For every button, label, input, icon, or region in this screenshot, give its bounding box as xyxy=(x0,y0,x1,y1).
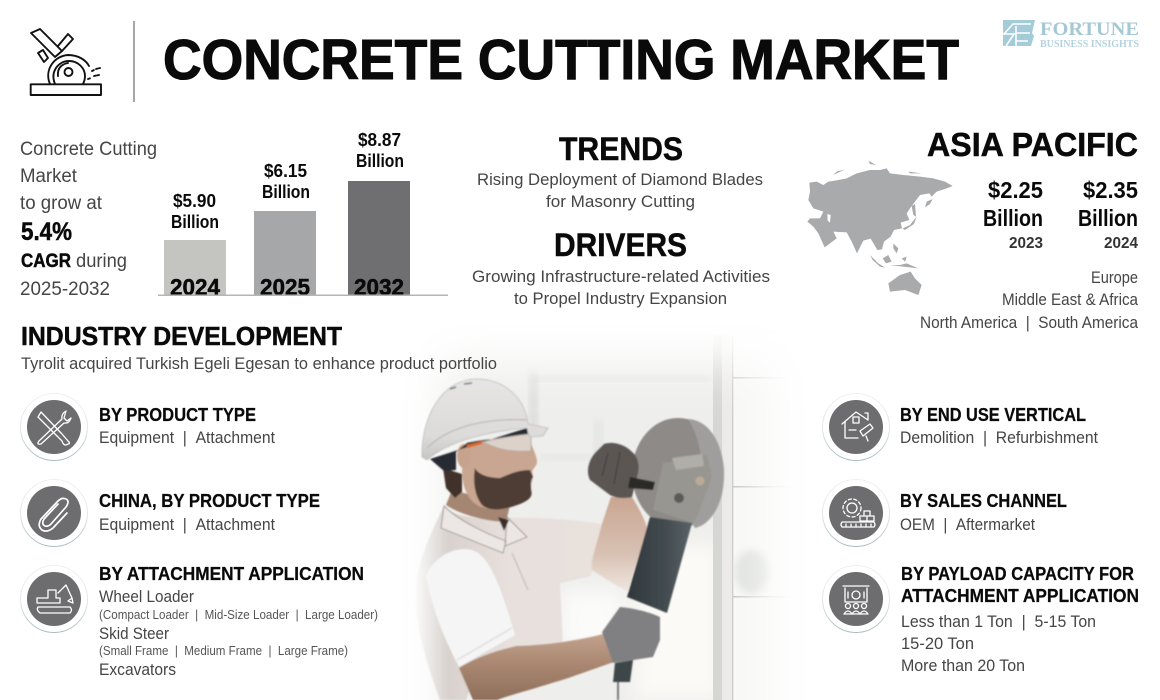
other regions: Middle East & Africa xyxy=(1002,291,1139,309)
options list xyxy=(99,588,378,679)
panel: trends xyxy=(477,131,763,211)
segment: China, by product type xyxy=(20,480,320,546)
options list: Less than 1 Ton | 5-15 Ton xyxy=(901,613,1096,631)
bar 2032 xyxy=(348,130,410,300)
bar 2024: $5.90 xyxy=(173,191,216,211)
logo wordmark: FORTUNE xyxy=(1040,19,1139,40)
ear xyxy=(457,444,471,468)
other regions: Europe xyxy=(1091,269,1138,287)
lower glove xyxy=(602,607,660,663)
icon: gear on conveyor xyxy=(822,480,890,546)
title: CONCRETE CUTTING MARKET xyxy=(163,28,959,92)
panel: Asia Pacific xyxy=(920,126,1139,332)
segment: by payload capacity xyxy=(822,564,1139,675)
trends text: for Masonry Cutting xyxy=(546,193,695,211)
raised arm xyxy=(592,497,647,592)
options list: More than 20 Ton xyxy=(901,657,1025,675)
options list: Skid Steer xyxy=(99,625,169,643)
options list: Wheel Loader xyxy=(99,588,194,606)
options list: Excavators xyxy=(99,661,176,679)
bar 2025: 2025 xyxy=(260,274,310,300)
bar 2025: $6.15 xyxy=(264,161,307,181)
worker figure xyxy=(416,379,724,700)
shirt xyxy=(416,506,602,700)
options: Equipment | Attachment xyxy=(99,429,275,447)
segment: by end use vertical xyxy=(822,394,1098,460)
options list: 15-20 Ton xyxy=(901,635,974,653)
segment: by attachment application xyxy=(20,564,378,679)
bar 2024 xyxy=(164,191,226,300)
bar 2024: Billion xyxy=(171,212,219,232)
text block: CAGR summary: Market xyxy=(20,166,78,187)
text block: CAGR summary: 5.4% xyxy=(21,218,72,246)
options: Equipment | Attachment xyxy=(99,516,275,534)
power cord xyxy=(617,682,619,700)
icon: wrench and screwdriver xyxy=(20,394,88,460)
value 2023: 2023 xyxy=(1009,235,1043,252)
cap under helmet xyxy=(430,428,528,471)
options list: (Compact Loader | Mid-Size Loader | Large Loader) xyxy=(99,608,378,622)
neck xyxy=(446,490,510,522)
logo: Fortune Business Insights xyxy=(1003,19,1139,50)
icon: excavator xyxy=(20,566,88,632)
bar 2032: $8.87 xyxy=(358,130,401,150)
heading: BY PRODUCT TYPE xyxy=(99,405,256,425)
logo mark xyxy=(1003,20,1035,46)
photo: construction worker cutting a concrete wall xyxy=(418,342,780,700)
sleeve xyxy=(426,549,515,667)
face xyxy=(462,436,537,509)
heading: BY PAYLOAD CAPACITY FOR xyxy=(901,564,1134,584)
bar 2025 xyxy=(254,161,316,300)
bar 2025: Billion xyxy=(262,182,310,202)
options list xyxy=(901,613,1096,675)
front grip xyxy=(38,50,48,62)
gear head xyxy=(653,455,712,523)
drivers text: Growing Infrastructure-related Activities xyxy=(472,268,770,286)
text block: CAGR summary: 2025-2032 xyxy=(20,279,110,300)
text block: CAGR summary: CAGR xyxy=(21,251,71,272)
text block: CAGR summary: during xyxy=(76,251,127,272)
heading: ATTACHMENT APPLICATION xyxy=(901,586,1139,606)
panel: drivers xyxy=(472,227,770,308)
bar 2032: 2032 xyxy=(354,274,404,300)
bar 2032: Billion xyxy=(356,151,404,171)
segment: by sales channel xyxy=(822,480,1067,546)
value 2024: Billion xyxy=(1078,205,1138,231)
header icon: concrete saw xyxy=(31,29,101,95)
safety glasses xyxy=(482,434,531,451)
heading: BY ATTACHMENT APPLICATION xyxy=(99,564,364,584)
icon: presentation with people xyxy=(822,566,890,632)
other regions xyxy=(920,269,1139,332)
map: Asia Pacific xyxy=(807,161,953,295)
beard xyxy=(474,468,533,509)
icon: paperclip xyxy=(20,480,88,546)
value 2023: $2.25 xyxy=(988,177,1043,203)
rear handle xyxy=(58,34,73,51)
grinder body xyxy=(627,517,692,613)
drivers text xyxy=(472,268,770,308)
drivers text: to Propel Industry Expansion xyxy=(514,290,727,308)
sparks xyxy=(88,68,100,79)
value 2024: $2.35 xyxy=(1083,177,1138,203)
heading: trends: TRENDS xyxy=(559,131,683,167)
heading: drivers: DRIVERS xyxy=(554,227,687,263)
logo tagline: BUSINESS INSIGHTS xyxy=(1040,39,1139,50)
text block: CAGR summary: to grow at xyxy=(20,193,103,214)
disc guard xyxy=(632,418,724,528)
other regions: North America | South America xyxy=(920,314,1139,332)
upper glove xyxy=(588,443,639,498)
value 2024: 2024 xyxy=(1104,235,1138,252)
rear handle xyxy=(613,660,633,682)
bar chart: market size xyxy=(158,130,448,300)
saw motor xyxy=(31,29,62,57)
segment: by product type xyxy=(20,394,275,460)
options: Demolition | Refurbishment xyxy=(900,429,1098,447)
photo backdrop: blurred wall xyxy=(442,342,780,700)
helmet xyxy=(422,379,548,460)
collar xyxy=(441,506,527,553)
heading: CHINA, BY PRODUCT TYPE xyxy=(99,491,320,511)
icon: house and paint roller xyxy=(822,394,890,460)
trends text: Rising Deployment of Diamond Blades xyxy=(477,171,763,189)
lower arm xyxy=(459,634,614,700)
header divider xyxy=(133,21,135,102)
value 2023: Billion xyxy=(983,205,1043,231)
value 2023 xyxy=(983,177,1043,252)
icon base slab xyxy=(31,84,101,95)
heading: BY SALES CHANNEL xyxy=(900,491,1067,511)
text: industry development detail: Tyrolit acquired Turkish Egeli Egesan to enhance product portfolio xyxy=(21,355,497,373)
value 2024 xyxy=(1078,177,1138,252)
heading: Asia Pacific: ASIA PACIFIC xyxy=(927,126,1138,163)
options: OEM | Aftermarket xyxy=(900,516,1035,534)
heading: BY END USE VERTICAL xyxy=(900,405,1086,425)
heading xyxy=(901,564,1139,606)
heading: industry development: INDUSTRY DEVELOPMENT xyxy=(21,321,342,351)
bar 2024: 2024 xyxy=(170,274,220,300)
blade guard xyxy=(48,55,89,84)
options list: (Small Frame | Medium Frame | Large Frame) xyxy=(99,644,348,658)
trends text xyxy=(477,171,763,211)
text block: CAGR summary: Concrete Cutting xyxy=(20,139,157,160)
hair xyxy=(443,468,462,498)
text block: CAGR summary xyxy=(20,139,157,300)
